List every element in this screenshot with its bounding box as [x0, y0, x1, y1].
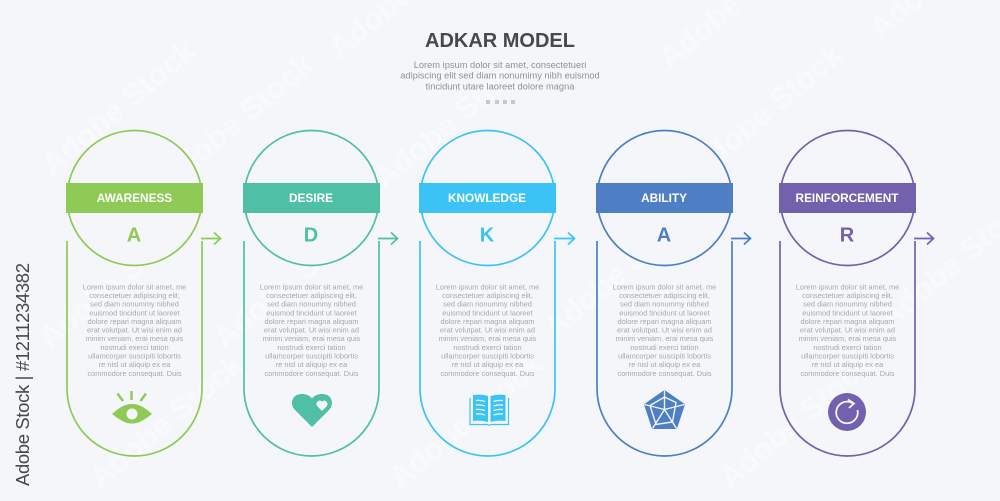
body text: ability: dolore repari magna aliquam — [617, 317, 712, 326]
infographic: Adobe Stock — [382, 346, 550, 495]
body text: desire: sed diam nonummy nibhed — [267, 300, 356, 309]
circle: ability — [597, 130, 732, 266]
body text: desire: re nisl ut aliquip ex ea — [276, 360, 348, 369]
body text: awareness: erat volutpat. Ut wisi enim ad — [87, 326, 182, 335]
heading: reinforcement: REINFORCEMENT — [796, 191, 899, 205]
circle: reinforcement — [780, 130, 915, 266]
icon: heart — [292, 394, 332, 427]
body text: ability — [613, 282, 716, 378]
body text: awareness: commodore consequat. Duis — [87, 369, 182, 378]
body text: knowledge: erat volutpat. Ut wisi enim ad — [440, 326, 535, 335]
body text: desire: dolore repari magna aliquam — [264, 317, 359, 326]
body text: ability: nostrudi exerci tation — [630, 343, 699, 352]
body text: desire — [260, 282, 363, 378]
letter: D: D — [304, 224, 318, 246]
band: desire — [243, 183, 380, 213]
body text: knowledge: commodore consequat. Duis — [440, 369, 535, 378]
heading: desire: DESIRE — [289, 191, 333, 205]
infographic: Adobe Stock — [82, 346, 250, 495]
outline: awareness — [67, 241, 202, 456]
band: awareness — [66, 183, 203, 213]
body text: ability: minim veniam, erai mesa quis — [616, 334, 714, 343]
body text: reinforcement: Lorem ipsum dolor sit amet, me — [796, 282, 899, 292]
infographic: Adobe Stock — [712, 346, 880, 495]
body text: awareness: Lorem ipsum dolor sit amet, me — [83, 282, 186, 292]
letter: K: K — [480, 224, 495, 246]
body text: desire: consectetuer adipiscing elit, — [266, 291, 357, 300]
letter: R: R — [840, 224, 855, 246]
body text: reinforcement: commodore consequat. Duis — [800, 369, 895, 378]
icon: refresh — [828, 393, 866, 431]
outline: knowledge — [420, 241, 555, 456]
body text: desire: commodore consequat. Duis — [264, 369, 359, 378]
subtitle text: adipiscing elit sed diam nonumimy nibh euismod — [400, 70, 600, 80]
body text: ability: consectetuer adipiscing elit, — [619, 291, 710, 300]
body text: awareness: re nisl ut aliquip ex ea — [99, 360, 171, 369]
body text: reinforcement: nostrudi exerci tation — [813, 343, 882, 352]
icon: radar pentagon — [644, 390, 684, 428]
body text: ability: erat volutpat. Ut wisi enim ad — [617, 326, 712, 335]
letter: A: A — [127, 224, 141, 246]
panel: awareness — [66, 130, 220, 456]
arrow: desire — [378, 232, 398, 244]
body text: awareness: nostrudi exerci tation — [100, 343, 169, 352]
body text: knowledge: sed diam nonummy nibhed — [443, 300, 532, 309]
body text: knowledge — [436, 282, 539, 378]
body text: reinforcement: ullamcorper suscipiti lobortis — [801, 352, 894, 360]
body text: reinforcement: dolore repari magna aliquam — [800, 317, 895, 326]
body text: awareness — [83, 282, 186, 378]
body text: awareness: minim veniam, erai mesa quis — [86, 334, 184, 343]
panel: desire — [243, 130, 398, 456]
body text: ability: commodore consequat. Duis — [617, 369, 712, 378]
body text: ability: ullamcorper suscipiti lobortis — [618, 352, 711, 360]
heading: knowledge: KNOWLEDGE — [448, 191, 526, 205]
arrow: awareness — [201, 232, 220, 244]
title: ADKAR MODEL — [425, 30, 575, 52]
outline: ability — [597, 241, 732, 456]
circle: awareness — [67, 130, 202, 266]
heading: ability: ABILITY — [641, 191, 687, 205]
arrow: knowledge — [554, 232, 574, 244]
band: knowledge — [419, 183, 556, 213]
band: reinforcement — [779, 183, 916, 213]
body text: reinforcement: minim veniam, erai mesa quis — [799, 334, 897, 343]
circle: knowledge — [420, 130, 555, 266]
outline: reinforcement — [780, 241, 915, 456]
panel: reinforcement — [779, 130, 934, 456]
body text: ability: euismod tincidunt ut laoreet — [619, 308, 710, 317]
circle: desire — [244, 130, 379, 266]
subtitle text — [400, 60, 600, 92]
body text: ability: re nisl ut aliquip ex ea — [629, 360, 701, 369]
infographic: Adobe Stock — [152, 46, 320, 195]
heading: awareness: AWARENESS — [97, 191, 172, 205]
infographic: Adobe Stock — [537, 196, 705, 345]
body text: awareness: dolore repari magna aliquam — [87, 317, 182, 326]
letter: A: A — [657, 224, 671, 246]
body text: knowledge: minim veniam, erai mesa quis — [439, 334, 537, 343]
body text: desire: minim veniam, erai mesa quis — [263, 334, 361, 343]
body text: knowledge: euismod tincidunt ut laoreet — [442, 308, 533, 317]
body text: reinforcement: consectetuer adipiscing elit, — [802, 291, 893, 300]
icon: open book — [470, 395, 508, 425]
body text: awareness: sed diam nonummy nibhed — [90, 300, 179, 309]
body text: reinforcement: re nisl ut aliquip ex ea — [812, 360, 884, 369]
body text: knowledge: Lorem ipsum dolor sit amet, me — [436, 282, 539, 292]
title dots — [486, 100, 515, 104]
subtitle text: tincidunt utare laoreet dolore magna — [426, 82, 575, 92]
icon: eye — [112, 391, 152, 424]
infographic: Adobe Stock — [367, 46, 535, 195]
body text: reinforcement: sed diam nonummy nibhed — [803, 300, 892, 309]
body text: desire: Lorem ipsum dolor sit amet, me — [260, 282, 363, 292]
body text: desire: ullamcorper suscipiti lobortis — [265, 352, 358, 360]
body text: desire: erat volutpat. Ut wisi enim ad — [264, 326, 359, 335]
subtitle text: Lorem ipsum dolor sit amet, consectetueri — [414, 60, 586, 70]
body text: reinforcement — [796, 282, 899, 378]
body text: knowledge: consectetuer adipiscing elit, — [442, 291, 533, 300]
band: ability — [596, 183, 733, 213]
body text: knowledge: nostrudi exerci tation — [453, 343, 522, 352]
body text: awareness: consectetuer adipiscing elit, — [89, 291, 180, 300]
body text: knowledge: re nisl ut aliquip ex ea — [452, 360, 524, 369]
arrow: reinforcement — [914, 232, 934, 244]
stock id watermark: Adobe Stock | #1211234382 — [12, 263, 33, 486]
outline: desire — [244, 241, 379, 456]
body text: desire: nostrudi exerci tation — [277, 343, 346, 352]
body text: awareness: ullamcorper suscipiti lobortis — [88, 352, 181, 360]
body text: knowledge: dolore repari magna aliquam — [440, 317, 535, 326]
arrow: ability — [731, 232, 750, 244]
body text: reinforcement: erat volutpat. Ut wisi enim ad — [800, 326, 895, 335]
body text: ability: sed diam nonummy nibhed — [620, 300, 709, 309]
infographic: Adobe Stock — [682, 36, 850, 185]
body text: desire: euismod tincidunt ut laoreet — [266, 308, 357, 317]
infographic: Adobe Stock — [32, 206, 200, 355]
infographic: Adobe Stock — [34, 33, 203, 182]
panel: knowledge — [419, 130, 574, 456]
body text: awareness: euismod tincidunt ut laoreet — [89, 308, 180, 317]
body text: reinforcement: euismod tincidunt ut laoreet — [802, 308, 893, 317]
panel: ability — [596, 130, 750, 456]
infographic: Adobe Stock — [207, 206, 375, 355]
body text: knowledge: ullamcorper suscipiti lobortis — [441, 352, 534, 360]
body text: ability: Lorem ipsum dolor sit amet, me — [613, 282, 716, 292]
